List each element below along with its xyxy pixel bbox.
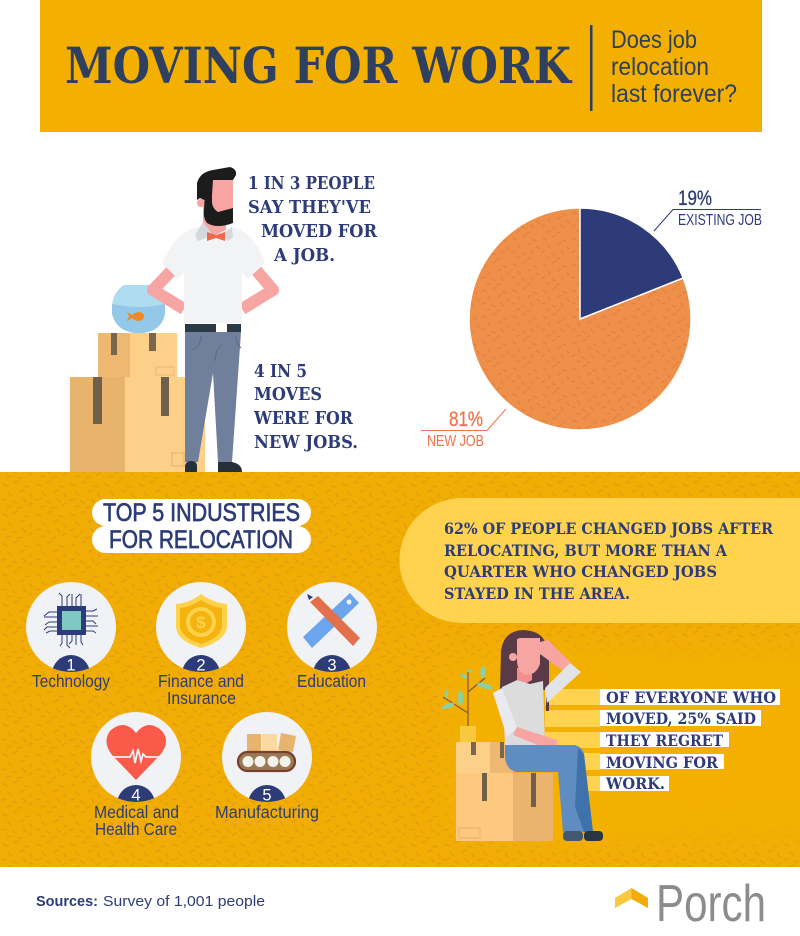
- statement: 25% regret moving: OF EVERYONE WHO: [606, 688, 776, 707]
- statement: 25% regret moving: [600, 688, 780, 793]
- label: finance and insurance: Insurance: [167, 688, 236, 708]
- statement: 25% regret moving: THEY REGRET: [606, 731, 723, 750]
- icon: shield with dollar coin: $: [196, 613, 206, 632]
- label: medical and health care: Medical and: [94, 802, 179, 822]
- industry 2: finance and insurance: [156, 582, 246, 708]
- subtitle: [611, 26, 737, 108]
- header banner: [40, 0, 762, 132]
- label: technology: Technology: [32, 671, 110, 691]
- label: 19% existing job: EXISTING JOB: [678, 212, 762, 229]
- logo: Porch: [615, 875, 766, 933]
- callout: 62% changed jobs: 62% OF PEOPLE CHANGED JOBS AFTER: [444, 519, 774, 538]
- industry 1: technology: [26, 582, 116, 693]
- moving boxes: [70, 333, 205, 472]
- text: 4 in 5 moves: 4 IN 5: [254, 361, 307, 382]
- woman: [493, 630, 603, 841]
- text: 1 in 3 people: 1 IN 3 PEOPLE: [248, 173, 375, 194]
- label: education: Education: [297, 671, 366, 691]
- pie slice: existing job 19%: [580, 208, 683, 319]
- sources footer: [36, 893, 265, 910]
- number badge 5: 5: [262, 786, 272, 804]
- heading: top 5 industries: [92, 499, 311, 554]
- text: 1 in 3 people: [248, 173, 378, 266]
- label: 81% new job: [421, 408, 506, 450]
- sources footer: Survey of 1,001 people: [103, 893, 265, 910]
- icon: fishbowl: [112, 280, 165, 334]
- sources footer: Sources:: [36, 893, 98, 910]
- label: medical and health care: [94, 802, 179, 839]
- industry 3: education: [287, 582, 377, 693]
- subtitle: Does job: [611, 26, 697, 54]
- illustration: seated woman with boxes and plant: [441, 630, 603, 841]
- number badge 4: 4: [131, 786, 141, 804]
- label: medical and health care: Health Care: [95, 819, 177, 839]
- heading: top 5 industries: FOR RELOCATION: [109, 526, 293, 554]
- label: finance and insurance: Finance and: [158, 671, 244, 691]
- pie chart: [421, 187, 762, 450]
- callout: 62% changed jobs: STAYED IN THE AREA.: [444, 584, 630, 603]
- icon: roof chevron: [615, 888, 648, 908]
- label: 19% existing job: [654, 187, 762, 231]
- text: 4 in 5 moves: MOVES: [254, 384, 322, 405]
- number badge 2: 2: [196, 656, 206, 674]
- illustration: man with boxes and fishbowl: [70, 167, 273, 472]
- title: MOVING FOR WORK: [65, 36, 572, 95]
- panel: yellow lower section: [0, 472, 800, 867]
- statement: 25% regret moving: MOVED, 25% SAID: [606, 709, 756, 728]
- icon: ruler and pencil: [303, 593, 360, 648]
- industry 5: manufacturing: [215, 712, 319, 823]
- man: [153, 167, 273, 472]
- icon: microchip: [44, 593, 98, 648]
- plant: [441, 666, 493, 742]
- statement: 25% regret moving: WORK.: [605, 774, 665, 793]
- subtitle: last forever?: [611, 80, 737, 108]
- text: 1 in 3 people: A JOB.: [273, 245, 335, 266]
- label: manufacturing: Manufacturing: [215, 802, 319, 822]
- label: 81% new job: 81%: [449, 408, 483, 431]
- icon: heart with pulse: [106, 725, 166, 780]
- label: 81% new job: NEW JOB: [427, 433, 484, 450]
- yellow bars behind statement: [545, 689, 600, 791]
- text: 1 in 3 people: SAY THEY'VE: [248, 197, 371, 218]
- statement: 25% regret moving: MOVING FOR: [606, 753, 719, 772]
- industry 4: medical and health care: [91, 712, 181, 839]
- number badge 1: 1: [66, 656, 76, 674]
- label: finance and insurance: [158, 671, 244, 708]
- callout: 62% changed jobs: RELOCATING, BUT MORE THAN A: [444, 541, 728, 560]
- text: 4 in 5 moves: WERE FOR: [253, 408, 354, 429]
- label: 19% existing job: 19%: [678, 187, 712, 210]
- callout: 62% changed jobs: QUARTER WHO CHANGED JOBS: [444, 562, 717, 581]
- text: 4 in 5 moves: NEW JOBS.: [254, 432, 358, 453]
- number badge 3: 3: [327, 656, 337, 674]
- pie slice: new job 81%: [469, 208, 691, 430]
- logo: Porch: Porch: [656, 875, 766, 933]
- subtitle: relocation: [611, 53, 709, 81]
- text: 4 in 5 moves: [253, 361, 358, 453]
- boxes: [456, 742, 553, 841]
- callout: 62% changed jobs: [400, 498, 800, 623]
- text: 1 in 3 people: MOVED FOR: [261, 221, 378, 242]
- icon: conveyor belt: [238, 733, 296, 771]
- heading: top 5 industries: TOP 5 INDUSTRIES: [103, 499, 300, 527]
